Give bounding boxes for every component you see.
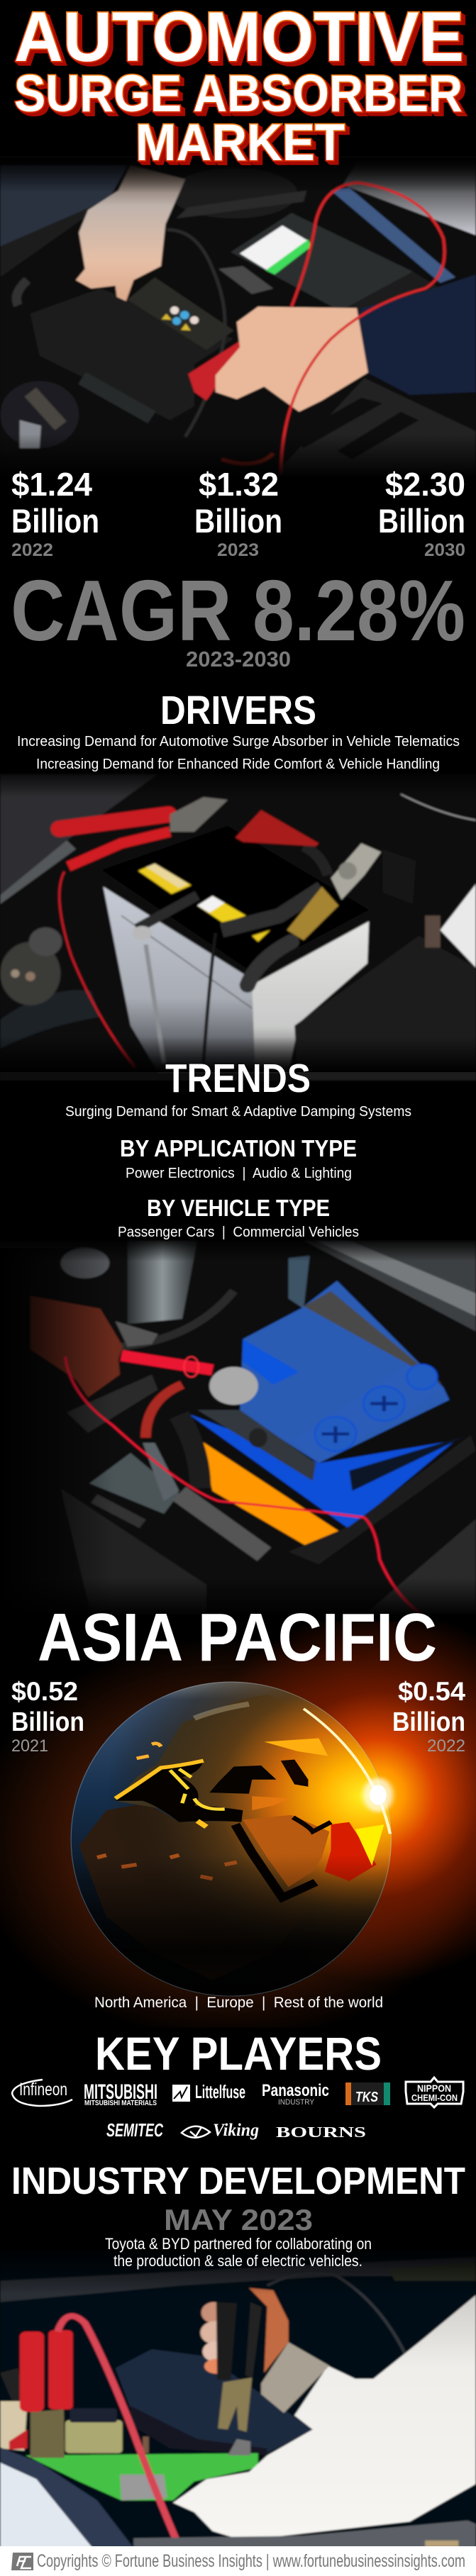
stat: 2022: $1.24 (11, 466, 92, 503)
logo: Viking (182, 2121, 259, 2140)
logos: key players (12, 2078, 463, 2141)
arabia and red sea (236, 1815, 384, 1897)
stat: 2023: $1.32 (199, 466, 279, 503)
photo: probing blue battery with red test lead (0, 1237, 476, 1617)
europe and mediterranean (116, 1760, 308, 1827)
logo: Panasonic (262, 2081, 329, 2107)
title: MARKET (135, 114, 345, 172)
logo: Mitsubishi: MITSUBISHI MATERIALS (84, 2100, 157, 2107)
stat: asia pacific 2021: 2021 (11, 1736, 48, 1756)
trends text: Surging Demand for Smart & Adaptive Damping Systems (65, 1104, 411, 1120)
logo: Semitec: SEMITEC (106, 2119, 164, 2141)
stat: 2030 (378, 466, 465, 560)
icon: Fortune Business Insights logo (11, 2553, 33, 2570)
logo: Viking: Viking (213, 2121, 259, 2140)
stat: asia pacific 2022: Billion (392, 1707, 465, 1737)
logo: Littelfuse (172, 2081, 245, 2102)
development description: Toyota & BYD partnered for collaborating on (105, 2235, 372, 2253)
logo: Panasonic: Panasonic (262, 2081, 329, 2100)
heading: trends: TRENDS (165, 1056, 311, 1101)
stat: 2030: $2.30 (385, 466, 465, 503)
logo: Littelfuse: Littelfuse (195, 2081, 245, 2102)
globe with solar glow (0, 1622, 476, 2027)
stat: asia pacific 2022: 2022 (427, 1736, 465, 1756)
logo: TKS: TKS (355, 2090, 379, 2105)
heading: by vehicle type: BY VEHICLE TYPE (147, 1195, 330, 1221)
logo: Nippon Chemi-Con: NIPPON (417, 2082, 451, 2094)
logo: TKS (345, 2082, 390, 2105)
development description: the production & sale of electric vehicles. (114, 2252, 362, 2270)
logo: Mitsubishi: MITSUBISHI (84, 2080, 157, 2104)
vehicle types: Passenger Cars | Commercial Vehicles (118, 1225, 359, 1240)
stat: 2022: 2022 (11, 540, 53, 560)
stat: asia pacific 2021: $0.52 (11, 1677, 78, 1706)
heading: drivers: DRIVERS (160, 688, 316, 733)
heading: asia pacific: ASIA PACIFIC (38, 1600, 437, 1675)
logo: Bourns: BOURNS (276, 2124, 366, 2141)
stat: asia pacific 2022 (392, 1677, 465, 1756)
heading: by application type: BY APPLICATION TYPE (120, 1135, 357, 1161)
stat: 2023: Billion (194, 502, 282, 540)
drivers list: Increasing Demand for Enhanced Ride Comfort & Vehicle Handling (36, 757, 440, 772)
stat: 2022: Billion (11, 502, 99, 540)
drivers list: Increasing Demand for Automotive Surge Absorber in Vehicle Telematics (17, 734, 460, 749)
logo: Nippon Chemi-Con (406, 2078, 463, 2107)
photo: hands connecting jumper cables under the hood (0, 157, 476, 478)
market value stats (11, 466, 465, 560)
development date: MAY 2023 (164, 2203, 313, 2236)
heading: key players: KEY PLAYERS (95, 2027, 382, 2080)
globe sphere (70, 1680, 392, 1997)
stat: asia pacific 2021 (11, 1677, 84, 1756)
other regions: North America | Europe | Rest of the world (94, 1995, 383, 2011)
photo: car battery with black and red clamps (0, 766, 476, 1081)
photo: gloved mechanic holding jumper clamp (0, 2244, 476, 2550)
drivers list (17, 734, 460, 772)
stat: asia pacific 2022: $0.54 (398, 1677, 465, 1706)
application types: Power Electronics | Audio & Lighting (126, 1166, 352, 1181)
stat: 2030: 2030 (424, 540, 465, 560)
development description (105, 2235, 372, 2270)
logo: Infineon (12, 2080, 72, 2106)
logo: Panasonic: INDUSTRY (278, 2098, 315, 2107)
title (14, 0, 464, 172)
logo: Nippon Chemi-Con: CHEMI-CON (411, 2092, 458, 2103)
sun flare (362, 1778, 393, 1812)
stat: asia pacific 2021: Billion (11, 1707, 84, 1737)
logo: Mitsubishi (84, 2080, 157, 2107)
CAGR period: 2023-2030 (186, 647, 291, 671)
stat: 2023 (194, 466, 282, 560)
footer (0, 2546, 476, 2576)
stat: 2022 (11, 466, 99, 560)
stat: 2023: 2023 (217, 540, 259, 560)
logo: Infineon: Infineon (19, 2080, 67, 2100)
